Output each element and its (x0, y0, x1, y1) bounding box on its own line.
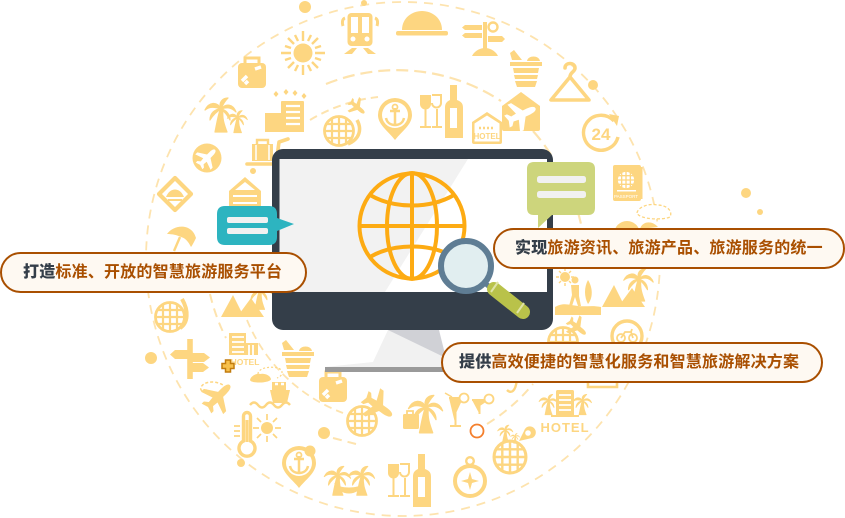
icon: partly hidden globe behind callout (614, 221, 640, 247)
icon: hotel left (229, 333, 259, 367)
icon: small sun (253, 414, 281, 442)
icon: 24 hour clock (584, 114, 619, 150)
callout: platform (0, 252, 307, 293)
decorative dot: far right small (757, 209, 763, 215)
monitor (272, 149, 553, 330)
icon: wine and bottle (420, 85, 463, 138)
icon: compass (455, 457, 485, 496)
icon: hanger hook below callout (507, 378, 517, 392)
callout: solutions (441, 342, 823, 383)
decorative dot: upper right (588, 80, 598, 90)
decorative dot: bottom small (237, 459, 245, 467)
icon: thermometer (234, 412, 255, 456)
icon: airplane in circle (191, 142, 223, 174)
icon: passport: PASSPORT (614, 194, 638, 199)
icon: magnifying glass (441, 241, 524, 313)
callout: platform: 打造标准、开放的智慧旅游服务平台 (23, 264, 282, 281)
icon: hotel card stack (229, 177, 261, 215)
icon: mountains and palm right (602, 269, 653, 307)
icon: hammock palms (324, 466, 375, 495)
icon: suitcase bottom (319, 372, 347, 402)
icon: luggage cart (247, 139, 288, 164)
decorative dot: left (145, 352, 157, 364)
icon: plus mark (222, 360, 234, 372)
icon: bicycle badge (612, 321, 642, 351)
callout: unified resources: 实现旅游资讯、旅游产品、旅游服务的统一 (515, 240, 823, 257)
icon: anchor pin bottom (282, 446, 316, 488)
icon: sun (281, 31, 325, 75)
icon: beach umbrella (167, 227, 196, 251)
icon: diamond road sign (159, 178, 191, 210)
monitor stand (325, 330, 450, 372)
icon: cocktails (445, 393, 494, 426)
icon: globe with palm and pin (494, 425, 536, 473)
icon: plane with dashed trail (195, 374, 241, 420)
icon: wine and bottle bottom (388, 454, 431, 507)
icon: passport (613, 165, 642, 201)
dashed orbit rings (146, 2, 660, 516)
icon: surfer (555, 276, 601, 315)
icon: hotel with palms (539, 390, 592, 435)
callout: unified resources (493, 228, 845, 269)
icon: hanger (551, 64, 589, 100)
green speech bubble (527, 162, 595, 228)
icon: beach sun (556, 268, 574, 286)
icon: globe with plane (324, 94, 370, 146)
icon: suitcase top (238, 58, 266, 88)
icon: globe and airplane (348, 384, 401, 436)
decorative dot: near cart (250, 168, 256, 174)
icon: hotel with stars (265, 89, 306, 132)
icon: mountains and palm left (221, 282, 272, 317)
icon: palm and luggage (403, 395, 443, 433)
icon: signpost (462, 22, 505, 56)
icon: basket top (510, 50, 542, 87)
icon: direction signpost (170, 339, 210, 379)
icon: small hotel sign (472, 112, 502, 144)
icon: ship with cloud (250, 367, 290, 408)
icon: anchor pin (378, 98, 412, 140)
callout: solutions: 提供高效便捷的智慧化服务和智慧旅游解决方案 (459, 354, 799, 371)
icon: orange ring (470, 424, 484, 438)
icon: dashed cloud right (637, 204, 671, 229)
icon: globe lower right (548, 312, 592, 356)
icon: small hotel sign: HOTEL (473, 132, 501, 141)
icon: envelope with plane (501, 92, 542, 135)
decorative dot: far right (741, 188, 751, 198)
icon: palm trees (205, 98, 247, 133)
icon: globe on screen (360, 173, 464, 279)
icon: globe left (156, 299, 187, 332)
icon: hotel sign below callout (588, 376, 617, 387)
decorative dot: top (299, 1, 311, 13)
icon: hotel with palms: HOTEL (540, 420, 590, 435)
icon: 24 hour clock: 24 (592, 125, 611, 144)
decorative dot: bottom (318, 427, 330, 439)
icon: basket left (282, 340, 314, 377)
icon: bus (342, 13, 378, 54)
decorative dot: top small (361, 0, 367, 6)
icon: hotel left: HOTEL (231, 357, 259, 367)
teal speech bubble (217, 206, 294, 245)
icon: cloche (396, 11, 448, 36)
